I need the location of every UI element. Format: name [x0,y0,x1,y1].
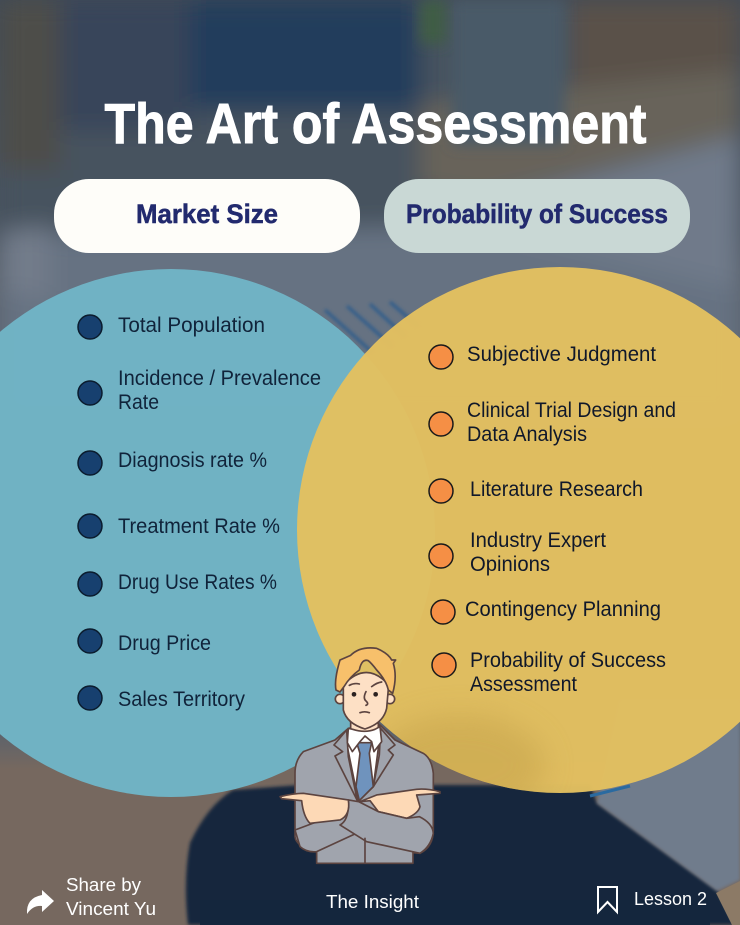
title: The Art of Assessment [104,92,647,156]
item: clinical trial design [429,399,676,446]
footer: share by [27,875,156,919]
item: industry expert opinions [429,529,606,576]
hair [335,648,396,693]
item: contingency planning: Contingency Planning [465,598,661,621]
item: clinical trial design: Clinical Trial Design and [467,399,676,422]
icon: bookmark [598,887,617,912]
right lapel [373,728,395,787]
circle: market size [0,269,435,797]
paper sheet [597,700,740,891]
item: total population: Total Population [118,314,265,337]
item: sales territory: Sales Territory [118,688,245,711]
left lapel [334,730,357,801]
chart strokes [325,302,418,352]
face [343,672,389,729]
item: diagnosis rate [78,449,267,475]
item: diagnosis rate: Diagnosis rate % [118,449,267,472]
vase [452,0,564,145]
icon: share arrow [27,890,54,914]
item: clinical trial design: Data Analysis [467,423,587,446]
item: literature research: Literature Research [470,478,643,501]
hand pointing left [280,793,349,823]
tan corner [716,881,740,925]
tie [356,743,373,801]
pill: probability of success [384,179,690,253]
footer: lesson: Lesson 2 [634,889,707,909]
suit centre seam [362,838,367,863]
item: drug price [78,629,211,655]
item: drug price: Drug Price [118,632,211,655]
pill: market size [54,179,360,253]
item: probability of success assessment: Probability of Success [470,649,666,672]
item: sales territory [78,686,245,711]
item: incidence / prevalence rate: Rate [118,391,159,414]
item: probability of success assessment: Assessment [470,673,577,696]
item: incidence / prevalence rate [78,367,321,414]
ears [335,694,395,704]
item: industry expert opinions: Industry Expert [470,529,606,552]
pill: probability of success: Probability of Success [406,199,668,229]
eyes, brows, nose, mouth [349,682,382,713]
list: probability of success factors [429,343,676,696]
dark object [186,785,735,925]
collar [347,727,382,752]
circle: probability of success [297,267,740,815]
footer: lesson [598,887,707,912]
footer: the insight: The Insight [326,892,419,912]
item: probability of success assessment [432,649,666,696]
footer: share by: Vincent Yu [66,899,156,919]
suit body [295,725,433,863]
item: incidence / prevalence rate: Incidence / Prevalence [118,367,321,390]
item: drug use rates: Drug Use Rates % [118,571,277,594]
shirt [347,730,381,801]
list: market size factors [78,314,321,711]
illustration: businessman pointing both ways [280,648,440,863]
footer: share by: Share by [66,875,141,895]
item: drug use rates [78,571,277,596]
hand pointing right [360,789,440,818]
pill: market size: Market Size [136,199,278,229]
sleeve: crossing arm [340,800,433,853]
sleeve: lower arm [295,810,360,852]
desk below [0,730,740,925]
item: treatment rate: Treatment Rate % [118,515,280,538]
item: subjective judgment: Subjective Judgment [467,343,656,366]
item: industry expert opinions: Opinions [470,553,550,576]
plant leaf [420,0,446,44]
blue chart marks at the paper edge [590,786,630,796]
neck [351,715,378,737]
